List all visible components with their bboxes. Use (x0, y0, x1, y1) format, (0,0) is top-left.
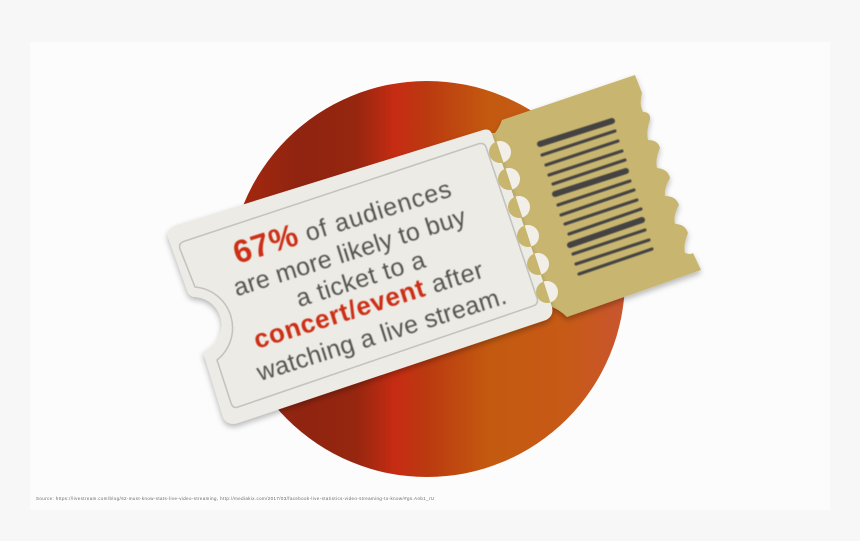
line 5: watching a live stream. (252, 282, 510, 387)
line 2: are more likely to buy (230, 202, 470, 302)
ticket message (229, 168, 510, 387)
stub body with scalloped edge (487, 75, 701, 317)
red orange disc (229, 81, 625, 477)
barcode (540, 121, 652, 274)
ticket stub (487, 75, 701, 317)
ticket inner border (180, 143, 538, 407)
line 1: 67% of audiences (229, 168, 455, 271)
source line: Source: https://livestream.com/blog/62-must-know-stats-live-video-streaming, http://mediakix.com/2017/03/facebook-live-statistics-video-streaming-to-know/#gs.Anb1_rU (36, 496, 434, 501)
perforations (486, 138, 561, 306)
line 4: concert/event after (250, 254, 487, 355)
ticket body (168, 130, 552, 424)
line 3: a ticket to a (292, 246, 429, 313)
ticket outline with notch (168, 130, 552, 424)
